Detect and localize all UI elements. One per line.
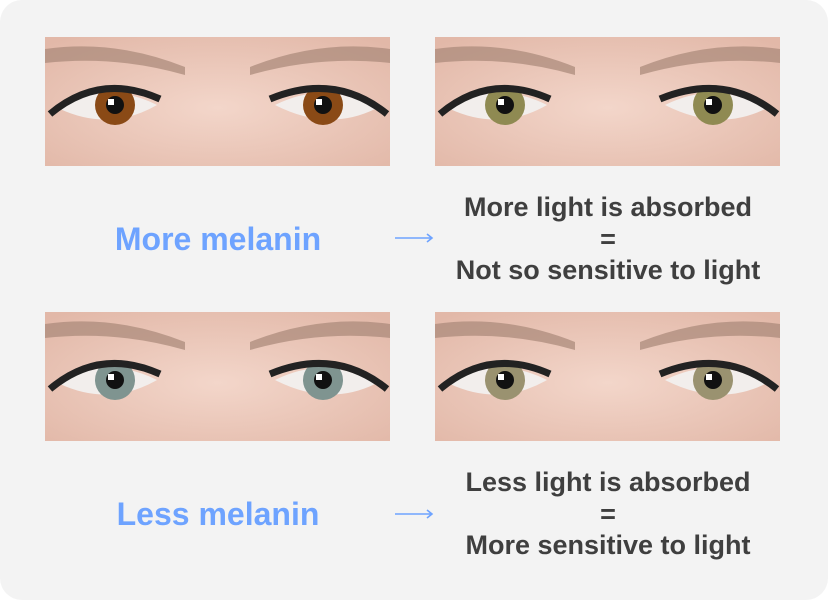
- result text: bottom: =: [600, 498, 616, 528]
- arrow: bottom: [395, 510, 434, 518]
- result text: top: More light is absorbed: [464, 192, 752, 222]
- arrow: top: [395, 234, 434, 242]
- photo: light hazel eyes: [435, 312, 780, 441]
- result text: top: Not so sensitive to light: [456, 255, 760, 285]
- photo: brown eyes: [45, 37, 390, 166]
- photo: blue-grey eyes: [45, 312, 390, 441]
- result text: top: [456, 192, 760, 285]
- label: less melanin: Less melanin: [117, 496, 319, 532]
- result text: bottom: [465, 467, 751, 560]
- result text: top: =: [600, 224, 616, 254]
- label: more melanin: More melanin: [115, 221, 321, 257]
- photo: green-hazel eyes: [435, 37, 780, 166]
- result text: bottom: Less light is absorbed: [465, 467, 751, 497]
- result text: bottom: More sensitive to light: [465, 530, 751, 560]
